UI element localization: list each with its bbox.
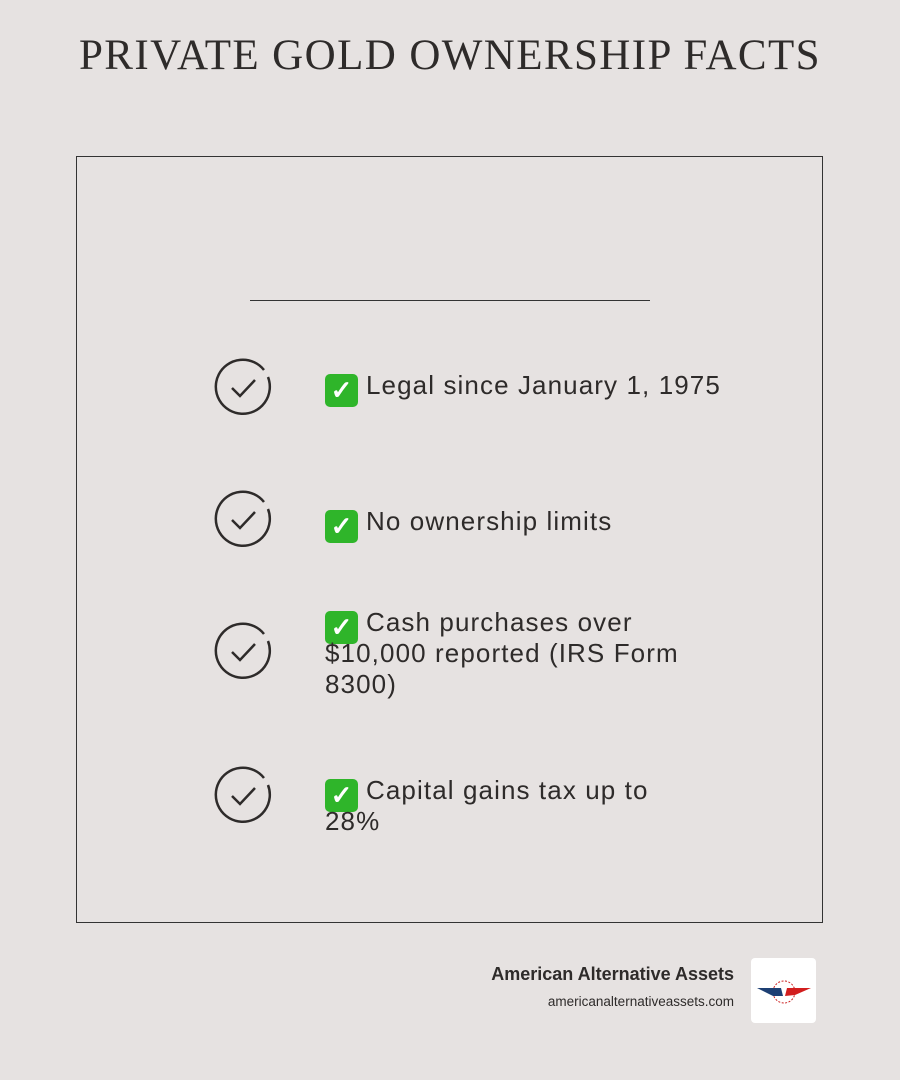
text: fact 1: ✓: [331, 375, 352, 405]
footer brand: American Alternative Assets: [491, 964, 734, 984]
icon: check 1: [214, 358, 272, 415]
icon: check 3: [214, 622, 272, 679]
footer brand: americanalternativeassets.com: [548, 994, 734, 1009]
title: PRIVATE GOLD OWNERSHIP FACTS: [79, 32, 821, 79]
icon: logo: [751, 958, 816, 1023]
text: fact 3: [325, 607, 679, 699]
text: fact 4: 28%: [325, 806, 380, 836]
panel: facts: [76, 156, 823, 923]
text: fact 2: No ownership limits: [366, 506, 612, 536]
divider line: [250, 300, 650, 301]
text: fact 2: [325, 506, 612, 543]
text: fact 3: 8300): [325, 669, 397, 699]
footer brand: [491, 964, 734, 1009]
text: fact 4: ✓: [331, 780, 352, 810]
text: fact 4: Capital gains tax up to: [366, 775, 649, 805]
text: fact 4: [325, 775, 649, 836]
text: fact 3: Cash purchases over: [366, 607, 633, 637]
icon: check 2: [214, 490, 272, 547]
text: fact 3: ✓: [331, 612, 352, 642]
text: fact 3: $10,000 reported (IRS Form: [325, 638, 679, 668]
text: fact 2: ✓: [331, 511, 352, 541]
text: fact 1: Legal since January 1, 1975: [366, 370, 721, 400]
icon: check 4: [214, 766, 272, 823]
